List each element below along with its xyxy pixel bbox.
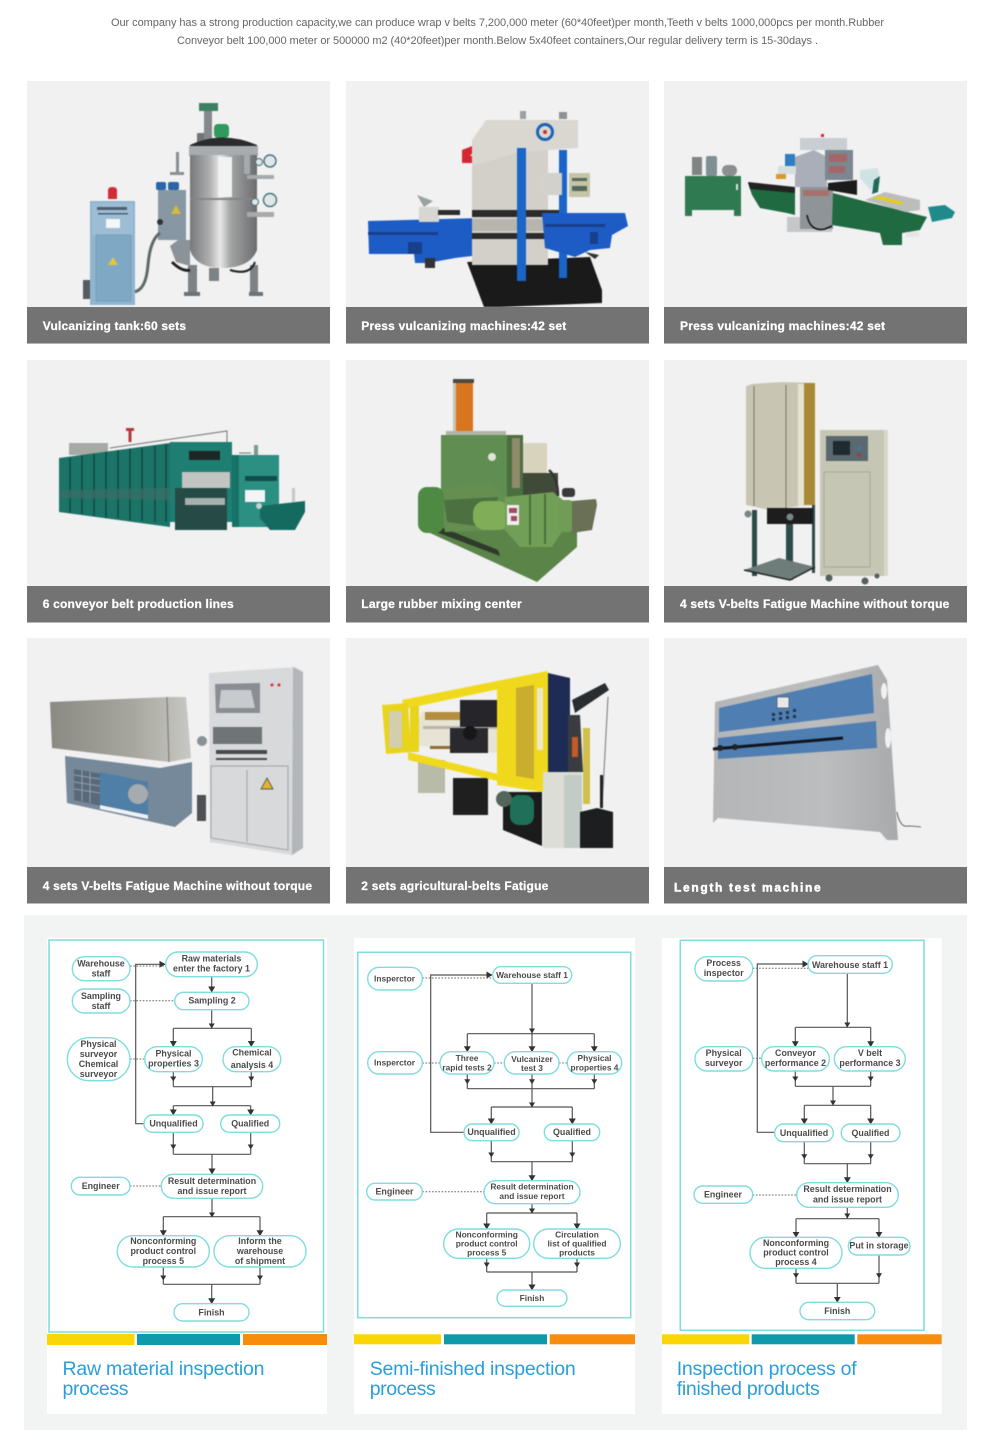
caption bar: 4 sets V-belts Fatigue Machine without torque <box>680 597 950 611</box>
node: Qualified <box>544 1124 600 1141</box>
heading <box>677 1358 857 1400</box>
heading <box>62 1358 264 1400</box>
heading: Semi-finished inspection <box>370 1358 576 1380</box>
node: Result determination <box>161 1174 263 1198</box>
node: Vulcanizer test 3 <box>504 1052 559 1074</box>
node: Insperctor <box>368 1052 422 1074</box>
flowchart: raw material inspection <box>47 938 327 1414</box>
panel: vulcanizing tank <box>27 81 330 344</box>
node: surveyors: surveyor <box>80 1069 118 1079</box>
intro paragraph <box>111 17 884 47</box>
node: Physical surveyor <box>695 1047 753 1071</box>
caption bar <box>27 867 330 904</box>
caption bar <box>664 867 967 904</box>
node: Finish: Finish <box>824 1306 850 1316</box>
node: Put in storage: Put in storage <box>849 1240 909 1250</box>
illustration: wide fatigue machine <box>50 667 303 855</box>
flowchart: semi-finished inspection <box>354 938 635 1414</box>
node: Qualified: Qualified <box>231 1118 269 1128</box>
panel: rubber mixing center <box>346 360 649 622</box>
node: Result determination <box>484 1181 580 1204</box>
node: Physical properties 3: properties 3 <box>148 1058 199 1068</box>
node: Warehouse staff <box>72 957 130 981</box>
colour bar <box>662 1334 942 1344</box>
node: Nonconforming process 5: Nonconforming <box>130 1236 196 1246</box>
flowchart: finished product inspection <box>662 938 942 1414</box>
node: Conveyor performance 2 <box>762 1047 829 1071</box>
node: V belt performance 3: performance 3 <box>839 1058 901 1068</box>
node: Nonconforming process 4: process 4 <box>775 1257 817 1267</box>
caption bar <box>346 867 649 904</box>
node: Physical properties 3 <box>145 1047 202 1072</box>
node: Result determination: Result determination <box>490 1182 574 1192</box>
connector lines <box>753 964 882 1302</box>
node: Warehouse staff 1: Warehouse staff 1 <box>812 960 888 970</box>
panel: fatigue machine without torque (tall) <box>664 360 967 622</box>
node: Qualified <box>221 1115 280 1132</box>
node: surveyors <box>67 1038 130 1081</box>
connector lines <box>422 975 597 1290</box>
panel: agricultural belt fatigue machine <box>346 638 649 904</box>
illustration: yellow fatigue machine <box>382 671 613 848</box>
node: Nonconforming process 4: product control <box>763 1248 829 1258</box>
node: Raw materials <box>166 952 257 977</box>
node: Nonconforming process 5: product control <box>131 1246 196 1256</box>
node: Qualified: Qualified <box>852 1128 889 1138</box>
node: Physical properties 4: Physical <box>578 1053 612 1063</box>
colour bar <box>47 1334 327 1345</box>
illustration: blue press <box>368 111 628 307</box>
panel: press vulcanizing machine (blue) <box>346 81 649 344</box>
node: Unqualified <box>464 1124 519 1141</box>
node: Finish: Finish <box>198 1308 225 1318</box>
caption bar: Length test machine <box>674 880 821 894</box>
panel: fatigue machine without torque (wide) <box>27 638 330 904</box>
colour bar <box>354 1334 635 1344</box>
node: Warehouse staff: Warehouse <box>77 958 125 968</box>
node: Result determination: Result determination <box>168 1176 256 1186</box>
heading: Inspection process of <box>677 1358 857 1380</box>
node: Physical properties 4 <box>567 1052 622 1074</box>
caption bar: Press vulcanizing machines:42 set <box>680 319 885 333</box>
panel: press vulcanizing machine (green) <box>664 81 967 344</box>
node: Chemical analysis 4 <box>223 1047 281 1072</box>
node: Unqualified: Unqualified <box>149 1118 198 1128</box>
heading <box>370 1358 576 1400</box>
node: Vulcanizer test 3: Vulcanizer <box>511 1054 554 1064</box>
node: Qualified: Qualified <box>553 1127 591 1137</box>
node: Unqualified <box>144 1115 203 1132</box>
heading: process <box>370 1378 436 1400</box>
node: Warehouse staff 1 <box>493 967 572 983</box>
node: Inform the warehouse: Inform the <box>238 1236 282 1246</box>
node: Sampling staff: staff <box>92 1001 110 1011</box>
caption bar <box>27 586 330 622</box>
node: Vulcanizer test 3: test 3 <box>521 1063 543 1073</box>
node: Conveyor performance 2: performance 2 <box>765 1058 826 1068</box>
node: Raw materials: enter the factory 1 <box>173 964 250 974</box>
node: Nonconforming process 4 <box>750 1237 842 1268</box>
node: Inform the warehouse: of shipment <box>235 1256 285 1266</box>
node: Result determination <box>797 1183 898 1207</box>
node: Unqualified: Unqualified <box>780 1128 828 1138</box>
node: Warehouse staff 1 <box>808 956 892 973</box>
caption bar <box>664 586 967 622</box>
heading: process <box>62 1378 129 1400</box>
illustration: green press <box>685 134 955 245</box>
node: Physical surveyor: Physical <box>706 1048 742 1058</box>
node: Engineer: Engineer <box>376 1186 414 1196</box>
node: Engineer: Engineer <box>704 1190 743 1200</box>
node: Nonconforming process 5: process 5 <box>143 1256 184 1266</box>
node: Engineer <box>694 1186 753 1203</box>
caption bar <box>664 307 967 344</box>
node: surveyors: Physical <box>80 1039 117 1049</box>
node: surveyors: surveyor <box>80 1049 118 1059</box>
node: Unqualified: Unqualified <box>467 1127 516 1137</box>
node: Three rapid tests 2: Three <box>456 1053 479 1063</box>
node: V belt performance 3 <box>834 1047 905 1071</box>
intro paragraph: Conveyor belt 100,000 meter or 500000 m2 (40*20feet)per month.Below 5x40feet containers,Our regular delivery term is 15-30days . <box>177 35 818 47</box>
node: surveyors: Chemical <box>79 1059 118 1069</box>
node: Sampling 2 <box>175 992 249 1010</box>
node: Process inspector: inspector <box>704 968 744 978</box>
node: Insperctor: Insperctor <box>374 1058 416 1068</box>
node: Finish <box>497 1290 567 1306</box>
caption bar <box>27 307 330 344</box>
node: Nonconforming process 5: Nonconforming <box>456 1230 518 1240</box>
node: Warehouse staff: staff <box>92 968 110 978</box>
node: Result determination: Result determination <box>803 1184 892 1194</box>
node: Process inspector: Process <box>706 958 741 968</box>
node: Raw materials: Raw materials <box>182 954 241 964</box>
node: Qualified <box>841 1124 900 1142</box>
node: Engineer <box>367 1183 422 1200</box>
illustration: tall fatigue machine <box>744 382 888 584</box>
node: Circulation list: products <box>559 1248 595 1258</box>
node: Finish: Finish <box>520 1293 544 1303</box>
caption bar: Press vulcanizing machines:42 set <box>361 319 566 333</box>
illustration: length test machine <box>713 665 921 840</box>
node: Finish <box>174 1304 249 1321</box>
node: Three rapid tests 2: rapid tests 2 <box>442 1062 492 1072</box>
node: Inform the warehouse: warehouse <box>236 1246 283 1256</box>
node: Circulation list: list of qualified <box>547 1238 607 1248</box>
panel: conveyor belt production line <box>27 360 330 622</box>
illustration: vulcanizing tank <box>83 103 276 305</box>
caption bar: Large rubber mixing center <box>361 597 522 611</box>
node: Result determination: and issue report <box>813 1194 882 1204</box>
node: Conveyor performance 2: Conveyor <box>775 1048 817 1058</box>
node: Circulation list <box>534 1229 620 1258</box>
node: Nonconforming process 5 <box>117 1236 209 1267</box>
node: V belt performance 3: V belt <box>858 1048 882 1058</box>
caption bar: Vulcanizing tank:60 sets <box>43 319 186 333</box>
illustration: conveyor press line <box>59 428 305 530</box>
node: Chemical analysis 4: analysis 4 <box>231 1060 273 1070</box>
node: Inform the warehouse <box>214 1236 306 1267</box>
node: Finish <box>800 1302 875 1320</box>
node: Nonconforming process 4: Nonconforming <box>763 1238 829 1248</box>
node: Physical properties 4: properties 4 <box>571 1062 619 1072</box>
caption bar: 2 sets agricultural-belts Fatigue <box>361 879 549 893</box>
caption bar <box>346 307 649 344</box>
node: Engineer <box>71 1177 130 1195</box>
node: Sampling 2: Sampling 2 <box>188 996 236 1006</box>
section: inspection processes background <box>24 915 967 1430</box>
node: Three rapid tests 2 <box>440 1052 494 1074</box>
node: Result determination: and issue report <box>499 1191 565 1201</box>
node: Nonconforming process 5: product control <box>456 1238 518 1248</box>
caption bar: 4 sets V-belts Fatigue Machine without torque <box>43 879 312 893</box>
node: Nonconforming process 5 <box>444 1229 530 1258</box>
caption bar: 6 conveyor belt production lines <box>43 597 234 611</box>
node: Process inspector <box>695 957 753 981</box>
node: Put in storage <box>848 1237 910 1255</box>
node: Insperctor <box>368 967 422 990</box>
node: Nonconforming process 5: process 5 <box>467 1248 507 1258</box>
node: Chemical analysis 4: Chemical <box>232 1048 272 1058</box>
connector lines <box>130 964 263 1304</box>
panel: length test machine <box>664 638 967 904</box>
node: Warehouse staff 1: Warehouse staff 1 <box>496 970 568 980</box>
node: Engineer: Engineer <box>82 1181 120 1191</box>
node: Sampling staff <box>72 989 130 1013</box>
node: Circulation list: Circulation <box>555 1230 599 1240</box>
node: Physical surveyor: surveyor <box>705 1058 743 1068</box>
caption bar <box>346 586 649 622</box>
intro paragraph: Our company has a strong production capacity,we can produce wrap v belts 7,200,000 meter (60*40feet)per month,Teeth v belts 1000,000pcs per month.Rubber <box>111 17 884 29</box>
node: Unqualified <box>775 1124 833 1142</box>
node: Physical properties 3: Physical <box>155 1048 192 1058</box>
node: Sampling staff: Sampling <box>81 991 121 1001</box>
node: Insperctor: Insperctor <box>374 974 416 984</box>
heading: Raw material inspection <box>62 1358 264 1380</box>
node: Result determination: and issue report <box>177 1186 247 1196</box>
illustration: rubber mixer <box>418 379 597 582</box>
heading: finished products <box>677 1378 820 1400</box>
